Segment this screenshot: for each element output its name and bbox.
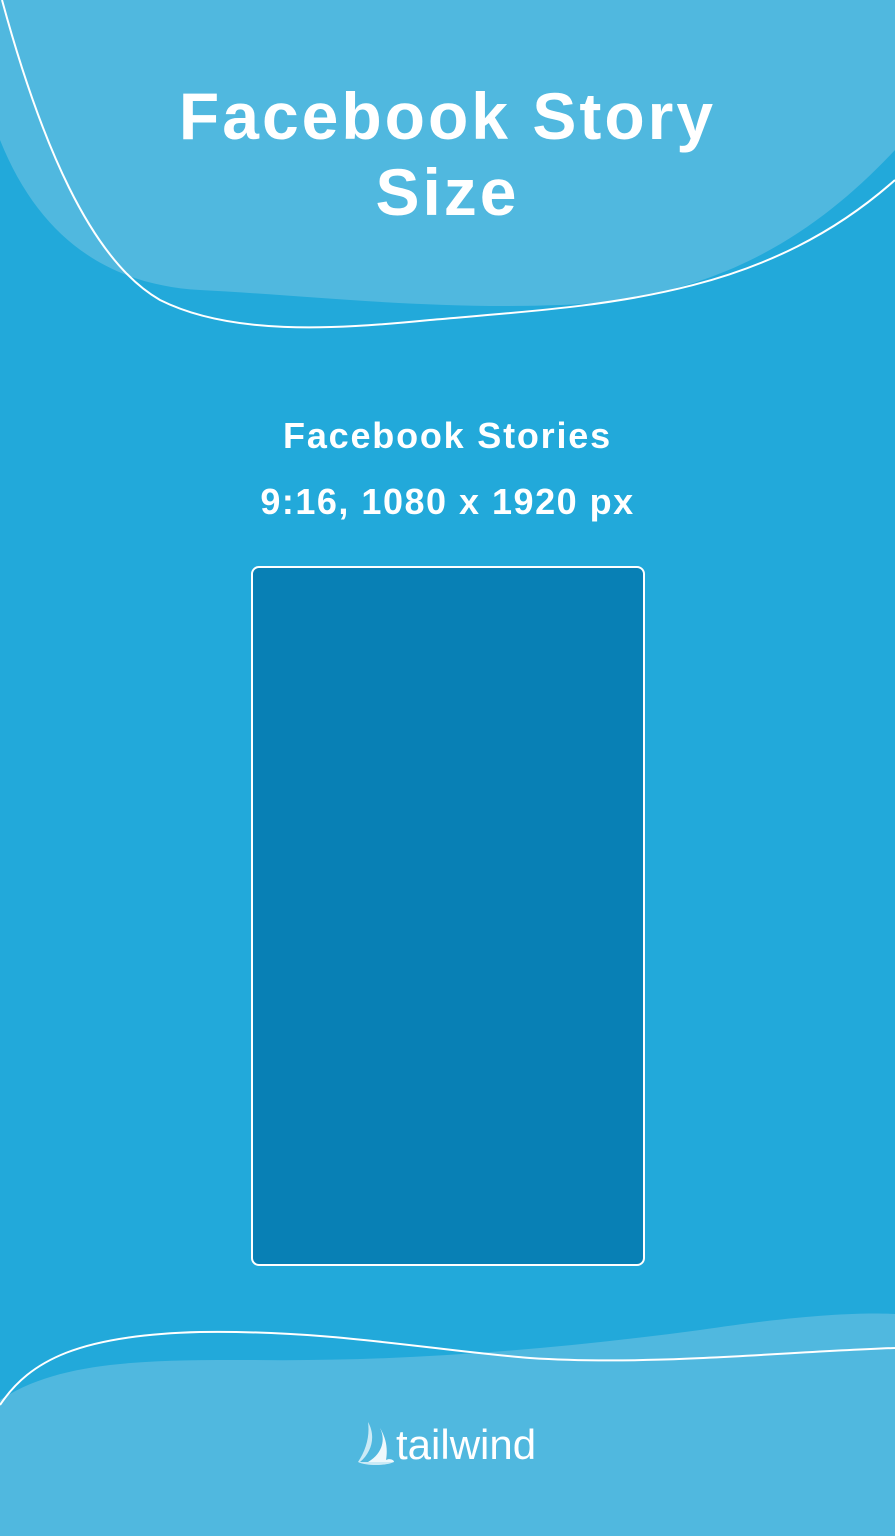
subtitle: Facebook Stories [283,415,612,456]
title: Size [375,155,520,229]
dimensions text: 9:16, 1080 x 1920 px [260,481,635,522]
title [179,79,716,229]
story frame [251,566,645,1266]
icon: sail [358,1422,394,1465]
title: Facebook Story [179,79,716,153]
logo: tailwind [358,1421,536,1468]
logo text: tailwind [396,1421,536,1468]
